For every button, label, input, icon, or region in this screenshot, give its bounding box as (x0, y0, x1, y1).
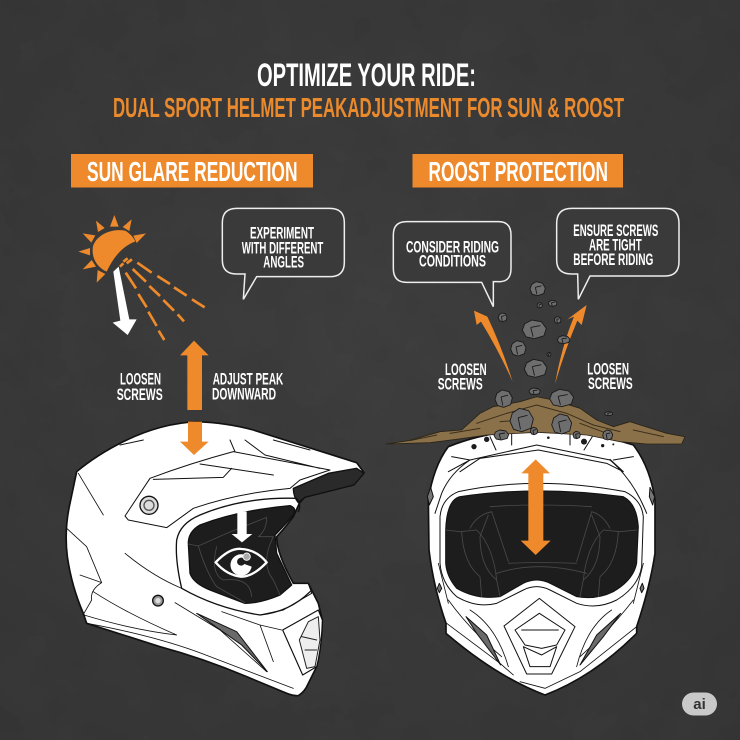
callout: ensure screws are tight: ARE TIGHT (589, 237, 642, 255)
side screws (427, 487, 655, 593)
dirt pile (386, 397, 685, 444)
callout: ensure screws are tight: BEFORE RIDING (573, 251, 653, 269)
label: loosen screws left: SCREWS (117, 386, 163, 404)
heading: roost protection: ROOST PROTECTION (428, 156, 608, 187)
label: loosen screws roost right: SCREWS (588, 375, 633, 393)
callout: experiment with different angles: WITH DIFFERENT (242, 239, 323, 257)
heading: roost protection (412, 154, 623, 188)
arrow: white pointing at eye (232, 512, 252, 542)
arrow: roost deflected left (474, 311, 513, 382)
title: OPTIMIZE YOUR RIDE: (257, 57, 476, 93)
peak lines (435, 432, 647, 513)
front helmet (386, 397, 685, 695)
side rivet (153, 595, 163, 606)
visor opening (446, 491, 638, 598)
helmet shell (428, 430, 655, 695)
label: loosen screws roost left (438, 361, 487, 393)
callout: consider riding conditions: CONSIDER RIDING (406, 238, 499, 256)
callout: ensure screws are tight: ENSURE SCREWS (573, 222, 658, 240)
label: adjust peak downward: ADJUST PEAK (213, 370, 283, 388)
arrow: peak adjustment up and down front view (521, 459, 551, 555)
label: loosen screws left: LOOSEN (120, 370, 161, 388)
title (113, 57, 624, 123)
visor opening (176, 498, 310, 615)
peak and side plate lines (120, 440, 330, 528)
icon: sun with rays (78, 215, 205, 340)
peak screw (140, 496, 158, 514)
callout: experiment with different angles: EXPERIMENT (250, 224, 314, 242)
heading: sun glare reduction (71, 154, 313, 188)
arrow: roost deflected right (555, 305, 587, 384)
peak underside (293, 468, 364, 503)
liner lines (188, 517, 280, 603)
callout: experiment with different angles (222, 208, 344, 299)
shell contour lines (67, 473, 293, 688)
label: adjust peak downward (212, 370, 283, 404)
label: loosen screws roost right: LOOSEN (587, 360, 629, 378)
label: loosen screws left (117, 370, 163, 404)
helmet shell (66, 422, 364, 696)
chin vent (283, 610, 322, 675)
chin contour lines (438, 563, 643, 688)
arrow: adjust peak up and down (180, 341, 209, 455)
badge: ai: ai (693, 696, 706, 713)
side vents (466, 613, 621, 665)
label: loosen screws roost right (587, 360, 633, 393)
callout: consider riding conditions (393, 222, 511, 307)
debris on helmet (471, 436, 614, 449)
vent (197, 613, 267, 672)
rocks (494, 282, 613, 440)
nose piece (504, 598, 575, 674)
heading: sun glare reduction: SUN GLARE REDUCTION (87, 156, 298, 187)
badge: ai (682, 692, 717, 716)
callout: ensure screws are tight (557, 208, 679, 299)
callout: experiment with different angles: ANGLES (263, 254, 304, 272)
label: loosen screws roost left: SCREWS (438, 375, 483, 393)
label: loosen screws roost left: LOOSEN (445, 361, 487, 379)
callout: consider riding conditions: CONDITIONS (419, 253, 486, 271)
liner lines (446, 505, 637, 597)
arrow: white glare arrow (113, 267, 137, 335)
label: adjust peak downward: DOWNWARD (212, 386, 276, 404)
goggle port (440, 483, 643, 606)
side helmet (66, 422, 364, 696)
icon: eye (216, 549, 267, 577)
